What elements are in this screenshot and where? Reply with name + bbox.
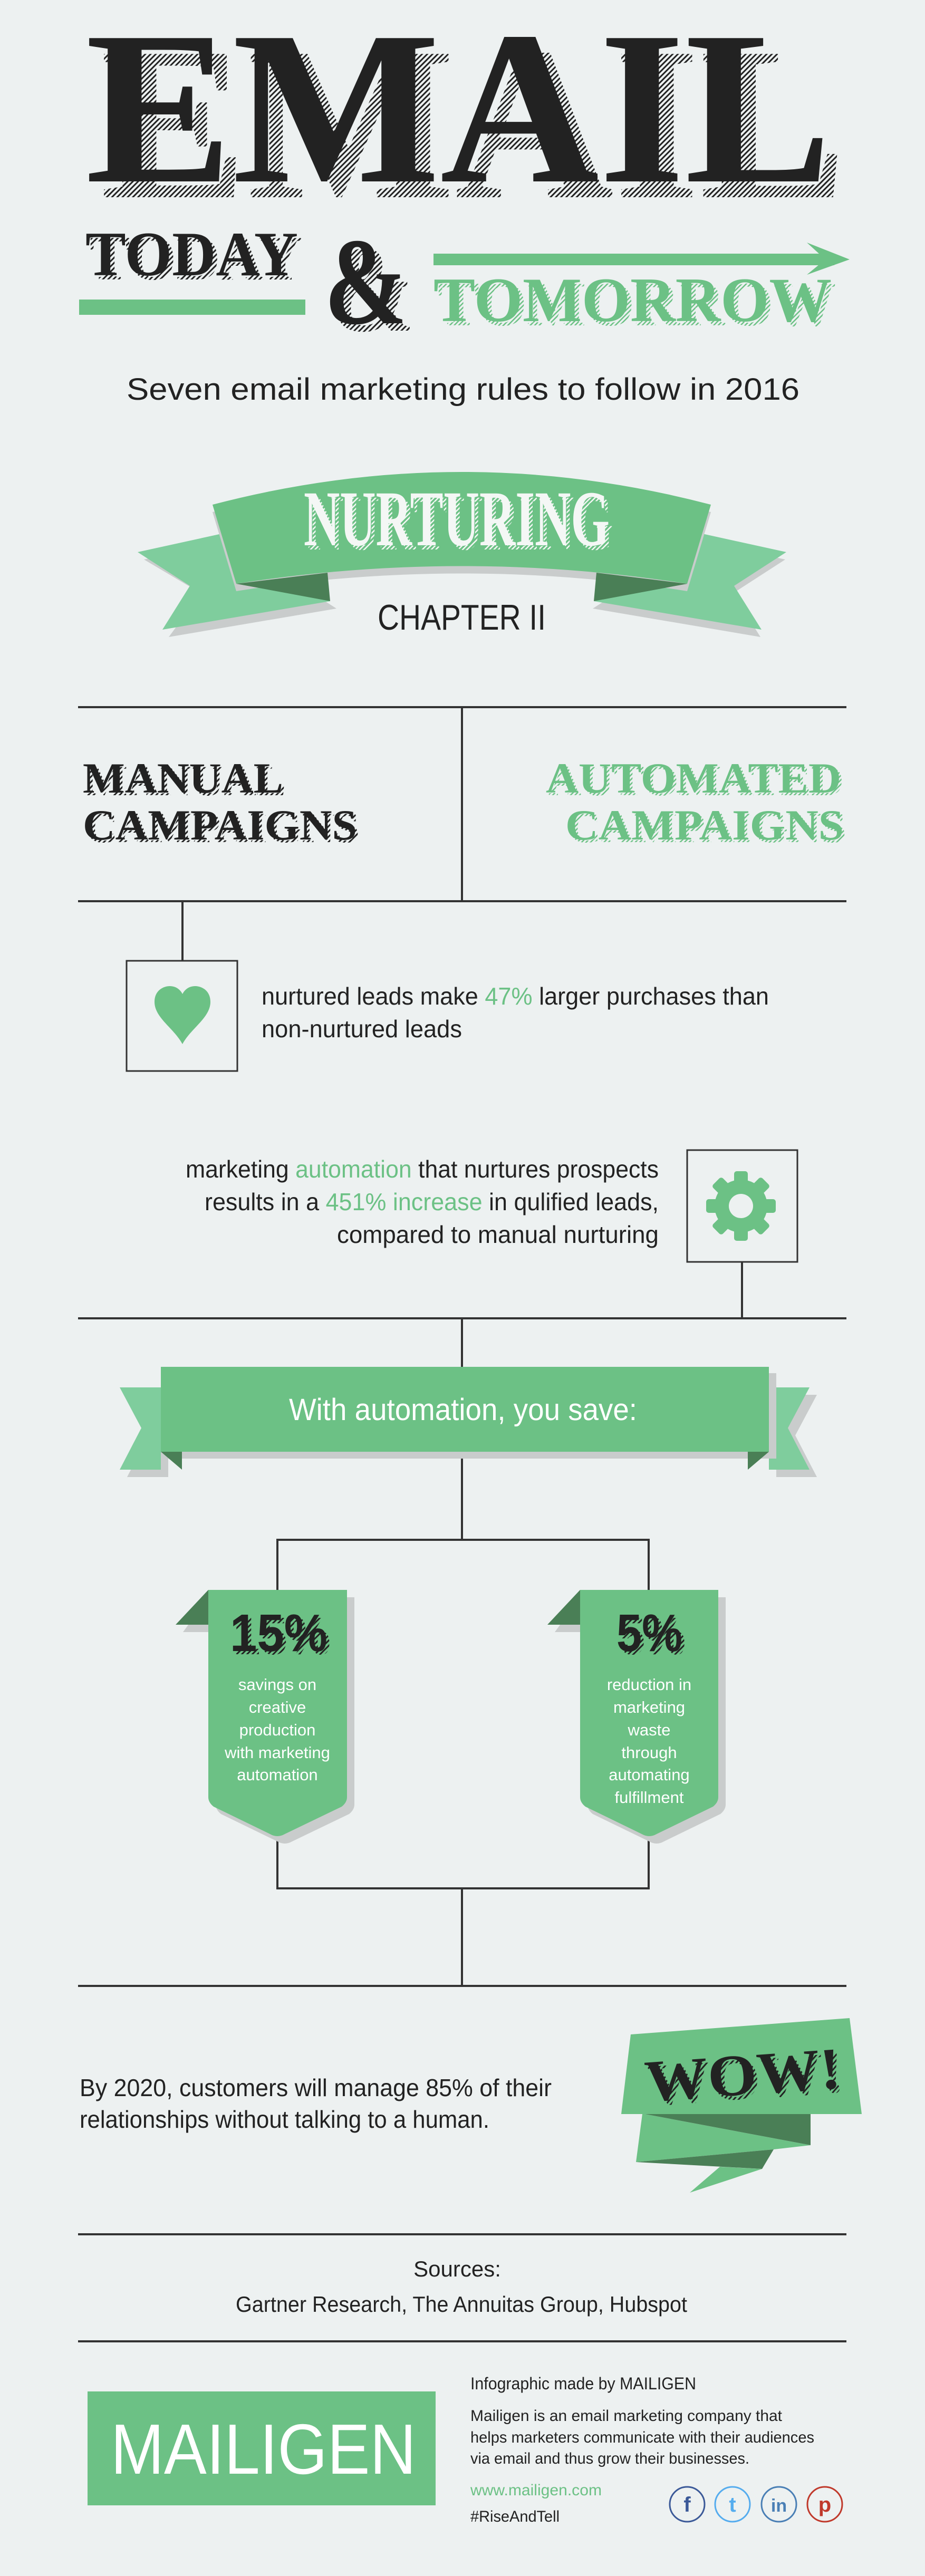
card: 15%: with marketing (224, 1743, 330, 1762)
icon: heart box (127, 961, 237, 1071)
subtitle: tomorrow: TOMORROW (433, 265, 832, 335)
heading: automated campaigns: CAMPAIGNS (568, 804, 846, 852)
card: 15%: savings on (238, 1675, 316, 1694)
sources: Sources: (413, 2256, 501, 2281)
stat: automation 451%: marketing automation that nurtures prospects (186, 1155, 667, 1183)
heading: manual campaigns: MANUAL (83, 754, 283, 802)
social icons: in (771, 2496, 787, 2516)
stat: automation 451%: results in a 451% increase in qulified leads, (205, 1188, 663, 1215)
card: 15%: 15% (233, 1607, 331, 1666)
callout: WOW: WOW! (642, 2035, 843, 2115)
social icons: p (818, 2493, 831, 2516)
card: 5%: 5% (620, 1607, 686, 1666)
heading: manual campaigns: CAMPAIGNS (85, 804, 360, 852)
about text: via email and thus grow their businesses. (470, 2450, 749, 2467)
heading: automated campaigns: AUTOMATED (546, 754, 841, 802)
ribbon: nurturing (138, 472, 786, 637)
heading: manual campaigns: CAMPAIGNS (83, 801, 357, 849)
sources (236, 2256, 687, 2317)
icon: gear box (687, 1150, 797, 1262)
card: 5%: fulfillment (615, 1788, 684, 1807)
about text (470, 2374, 814, 2525)
heading: automated campaigns: AUTOMATED (548, 757, 844, 805)
chapter label: CHAPTER II (378, 597, 546, 638)
card: 5%: 5% (616, 1604, 682, 1663)
card: 5%: reduction in (607, 1675, 691, 1694)
heading: manual campaigns: MANUAL (85, 757, 286, 805)
sources: Gartner Research, The Annuitas Group, Hubspot (236, 2292, 687, 2317)
heading: NURTURING (304, 475, 613, 567)
card: 5%: waste (628, 1721, 670, 1739)
logo: MAILIGEN (88, 2391, 436, 2505)
card: 5%: through (621, 1743, 677, 1762)
banner: with automation (120, 1367, 817, 1477)
heading: automated campaigns: CAMPAIGNS (565, 801, 844, 849)
ampersand: & (332, 220, 415, 358)
social icons: f (683, 2493, 691, 2516)
subtitle: today: TODAY (85, 219, 298, 289)
card: 5%: automating (609, 1765, 690, 1784)
card: 15%: automation (237, 1765, 318, 1784)
stat: nurtured leads: nurtured leads make 47% larger purchases than (262, 982, 774, 1010)
tagline: Seven email marketing rules to follow in 2016 (127, 372, 799, 407)
card: 15%: 15% (230, 1604, 327, 1663)
fact: by 2020: By 2020, customers will manage 85% of their (80, 2074, 552, 2101)
subtitle: tomorrow: TOMORROW (438, 269, 836, 339)
subtitle: today: TODAY (90, 223, 302, 293)
about text: #RiseAndTell (470, 2508, 560, 2525)
fact: by 2020: relationships without talking to a human. (80, 2106, 489, 2133)
card: 5%: marketing (613, 1698, 685, 1716)
arrow (433, 243, 850, 275)
banner text: With automation, you save: (289, 1393, 637, 1427)
card: 15%: creative (249, 1698, 306, 1716)
heading: NURTURING: NURTURING (307, 479, 613, 567)
card: 5% (547, 1590, 726, 1844)
about text: www.mailigen.com (470, 2482, 602, 2499)
heading: NURTURING: NURTURING (304, 475, 610, 563)
heading: automated campaigns (546, 754, 846, 852)
logo: MAILIGEN: MAILIGEN (111, 2409, 416, 2489)
ampersand: & (324, 213, 407, 350)
card: 15%: production (239, 1721, 315, 1739)
about text: Mailigen is an email marketing company that (470, 2407, 783, 2425)
card: 15% (176, 1590, 354, 1844)
social icons: t (729, 2493, 736, 2516)
social icons (670, 2487, 842, 2522)
stat: automation 451%: compared to manual nurturing (337, 1221, 659, 1248)
stat: nurtured leads: non-nurtured leads (262, 1015, 462, 1043)
title: EMAIL: EMAIL (100, 2, 846, 245)
heading: manual campaigns (83, 754, 360, 852)
about text: Infographic made by MAILIGEN (470, 2374, 696, 2393)
callout: WOW (621, 2018, 862, 2193)
callout: WOW: WOW! (646, 2040, 846, 2119)
about text: helps marketers communicate with their audiences (470, 2429, 814, 2446)
